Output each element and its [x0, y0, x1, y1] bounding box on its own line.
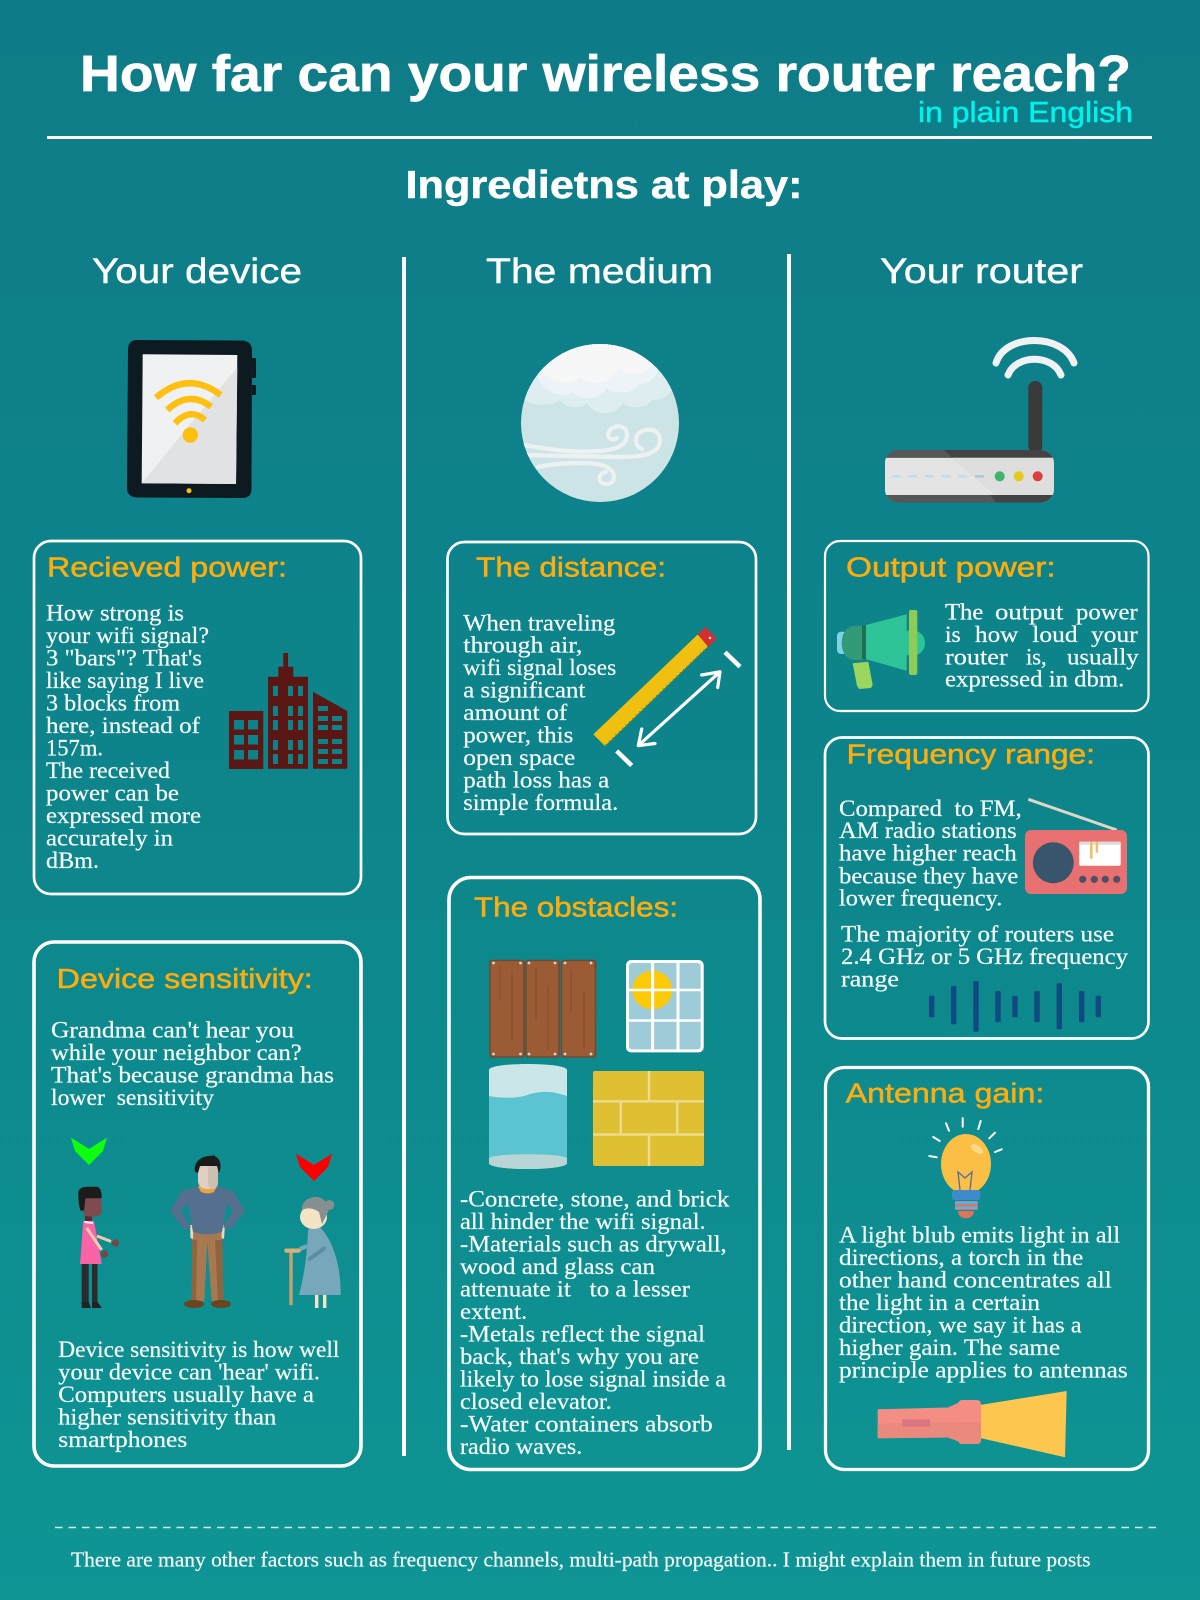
- text: received power explanation: 3 blocks from: [46, 691, 180, 717]
- divider: dashed footer rule: [55, 1526, 1156, 1528]
- figure: child neighbor: [78, 1187, 119, 1308]
- text: grandma analogy: while your neighbor can?: [51, 1040, 302, 1066]
- text: obstacles list: attenuate it to a lesser: [460, 1277, 690, 1303]
- text: router frequency bands: The majority of routers use: [841, 922, 1114, 948]
- text: device sensitivity definition: Device sensitivity is how well: [58, 1337, 340, 1363]
- text: router frequency bands: range: [841, 967, 899, 993]
- text: device sensitivity definition: your device can 'hear' wifi.: [58, 1360, 320, 1386]
- panel: frequency range: [825, 738, 1148, 1038]
- text: distance explanation: amount of: [463, 700, 567, 726]
- text: obstacles list: extent.: [460, 1299, 527, 1325]
- text: AM versus FM: because they have: [839, 863, 1018, 889]
- panel: the distance: [448, 542, 756, 834]
- text: obstacles list: -Metals reflect the signal: [460, 1322, 705, 1348]
- text: output power explanation: is,: [1026, 644, 1047, 670]
- panel: antenna gain: [826, 1068, 1148, 1470]
- text: distance explanation: through air,: [463, 633, 582, 659]
- text: obstacles list: radio waves.: [460, 1434, 582, 1460]
- heading: antenna gain: Antenna gain:: [846, 1078, 1044, 1109]
- text: output power explanation: loud: [1032, 622, 1078, 648]
- heading: frequency range: Frequency range:: [847, 738, 1095, 769]
- text: device sensitivity definition: [58, 1337, 340, 1453]
- panel: output power: [825, 541, 1148, 711]
- text: distance explanation: a significant: [463, 678, 586, 704]
- heading: the distance: The distance:: [476, 551, 666, 582]
- text: output power explanation: is: [945, 622, 961, 648]
- text: distance explanation: wifi signal loses: [463, 655, 616, 681]
- text: output power explanation: router: [945, 644, 1008, 670]
- text: distance explanation: path loss has a: [463, 768, 610, 794]
- icon: megaphone: [837, 610, 925, 689]
- text: output power explanation: The: [945, 600, 983, 626]
- heading: device sensitivity: Device sensitivity:: [57, 963, 313, 994]
- text: grandma analogy: That's because grandma has: [51, 1062, 334, 1088]
- icon: light bulb: [929, 1118, 1002, 1218]
- icon: torch with beam: [878, 1391, 1067, 1457]
- icon: green check: [71, 1138, 107, 1165]
- icon: ruler with distance arrow: [593, 627, 740, 766]
- text: received power explanation: your wifi signal?: [46, 623, 209, 649]
- text: obstacles list: -Materials such as drywall,: [460, 1232, 727, 1258]
- icon: wireless router: [885, 340, 1074, 502]
- text: antenna gain explanation: higher gain. The same: [839, 1335, 1060, 1361]
- text: output power explanation: how: [975, 622, 1018, 648]
- section heading: Ingredietns at play:: [406, 164, 802, 207]
- text: received power explanation: [46, 601, 209, 874]
- text: antenna gain explanation: principle applies to antennas: [839, 1358, 1128, 1384]
- heading: output power: Output power:: [846, 552, 1056, 583]
- text: received power explanation: here, instead of: [46, 713, 200, 739]
- text: grandma analogy: lower sensitivity: [51, 1085, 214, 1111]
- text: AM versus FM: [839, 796, 1022, 912]
- text: distance explanation: [463, 610, 618, 816]
- text: output power explanation: output: [995, 600, 1064, 626]
- text: antenna gain explanation: A light blub emits light in all: [839, 1223, 1120, 1249]
- icon: sky sphere with clouds and wind: [521, 344, 679, 502]
- text: AM versus FM: AM radio stations: [839, 818, 1017, 844]
- icon: wood planks: [490, 960, 596, 1057]
- text: output power explanation: expressed in dbm.: [945, 666, 1124, 692]
- heading: received power: Recieved power:: [47, 552, 287, 583]
- text: obstacles list: -Water containers absorb: [460, 1412, 713, 1438]
- text: received power explanation: power can be: [46, 781, 179, 807]
- icon: glass window: [626, 960, 704, 1052]
- text: device sensitivity definition: Computers usually have a: [58, 1382, 315, 1408]
- text: received power explanation: like saying I live: [46, 668, 204, 694]
- text: distance explanation: power, this: [463, 722, 573, 748]
- text: antenna gain explanation: [839, 1223, 1128, 1384]
- text: obstacles list: likely to lose signal inside a: [460, 1367, 727, 1393]
- icon: city buildings: [229, 653, 347, 769]
- text: obstacles list: all hinder the wifi signal.: [460, 1209, 706, 1235]
- text: received power explanation: How strong is: [46, 601, 184, 627]
- text: obstacles list: [460, 1187, 730, 1460]
- text: output power explanation: [945, 600, 1139, 692]
- text: obstacles list: wood and glass can: [460, 1254, 655, 1280]
- title: How far can your wireless router reach?: [80, 45, 1131, 102]
- panel: device sensitivity: [34, 942, 361, 1466]
- text: received power explanation: 3 "bars"? That's: [46, 646, 202, 672]
- text: obstacles list: -Concrete, stone, and brick: [460, 1187, 730, 1213]
- text: antenna gain explanation: direction, we say it has a: [839, 1313, 1082, 1339]
- footer note: There are many other factors such as frequency channels, multi-path propagation.. I might explain them in future posts: [71, 1548, 1090, 1572]
- subtitle: in plain English: [918, 97, 1133, 129]
- text: received power explanation: The received: [46, 758, 170, 784]
- text: received power explanation: 157m.: [46, 736, 103, 762]
- text: received power explanation: dBm.: [46, 848, 99, 874]
- text: grandma analogy: [51, 1018, 334, 1111]
- icon: glass of water: [489, 1064, 567, 1169]
- panel: the obstacles: [449, 878, 760, 1470]
- heading: the obstacles: The obstacles:: [474, 891, 678, 922]
- text: AM versus FM: Compared to FM,: [839, 796, 1022, 822]
- text: distance explanation: open space: [463, 745, 575, 771]
- panel: received power: [34, 541, 361, 894]
- text: obstacles list: back, that's why you are: [460, 1344, 699, 1370]
- text: antenna gain explanation: directions, a torch in the: [839, 1245, 1083, 1271]
- text: antenna gain explanation: other hand concentrates all: [839, 1268, 1112, 1294]
- text: distance explanation: When traveling: [463, 610, 616, 636]
- icon: red check: [296, 1154, 332, 1181]
- column heading: the medium: The medium: [486, 252, 713, 291]
- text: received power explanation: expressed more: [46, 803, 201, 829]
- icon: radio: [1025, 799, 1127, 894]
- icon: brick wall: [593, 1071, 704, 1166]
- text: AM versus FM: lower frequency.: [839, 886, 1002, 912]
- text: router frequency bands: 2.4 GHz or 5 GHz frequency: [841, 944, 1128, 970]
- icon: sound wave bars: [929, 981, 1101, 1032]
- text: router frequency bands: [841, 922, 1128, 993]
- figure: man: [170, 1154, 245, 1308]
- text: output power explanation: your: [1091, 622, 1138, 648]
- text: output power explanation: usually: [1067, 644, 1139, 670]
- column heading: your router: Your router: [880, 252, 1083, 291]
- text: device sensitivity definition: smartphones: [58, 1427, 187, 1453]
- icon: tablet with wifi: [127, 340, 256, 498]
- text: received power explanation: accurately in: [46, 826, 173, 852]
- text: antenna gain explanation: the light in a certain: [839, 1290, 1040, 1316]
- text: grandma analogy: Grandma can't hear you: [51, 1018, 294, 1044]
- figure: grandma with cane: [284, 1197, 341, 1308]
- text: distance explanation: simple formula.: [463, 790, 618, 816]
- text: obstacles list: closed elevator.: [460, 1389, 612, 1415]
- column heading: your device: Your device: [92, 252, 302, 291]
- text: AM versus FM: have higher reach: [839, 841, 1017, 867]
- text: device sensitivity definition: higher sensitivity than: [58, 1405, 277, 1431]
- text: output power explanation: power: [1076, 600, 1138, 626]
